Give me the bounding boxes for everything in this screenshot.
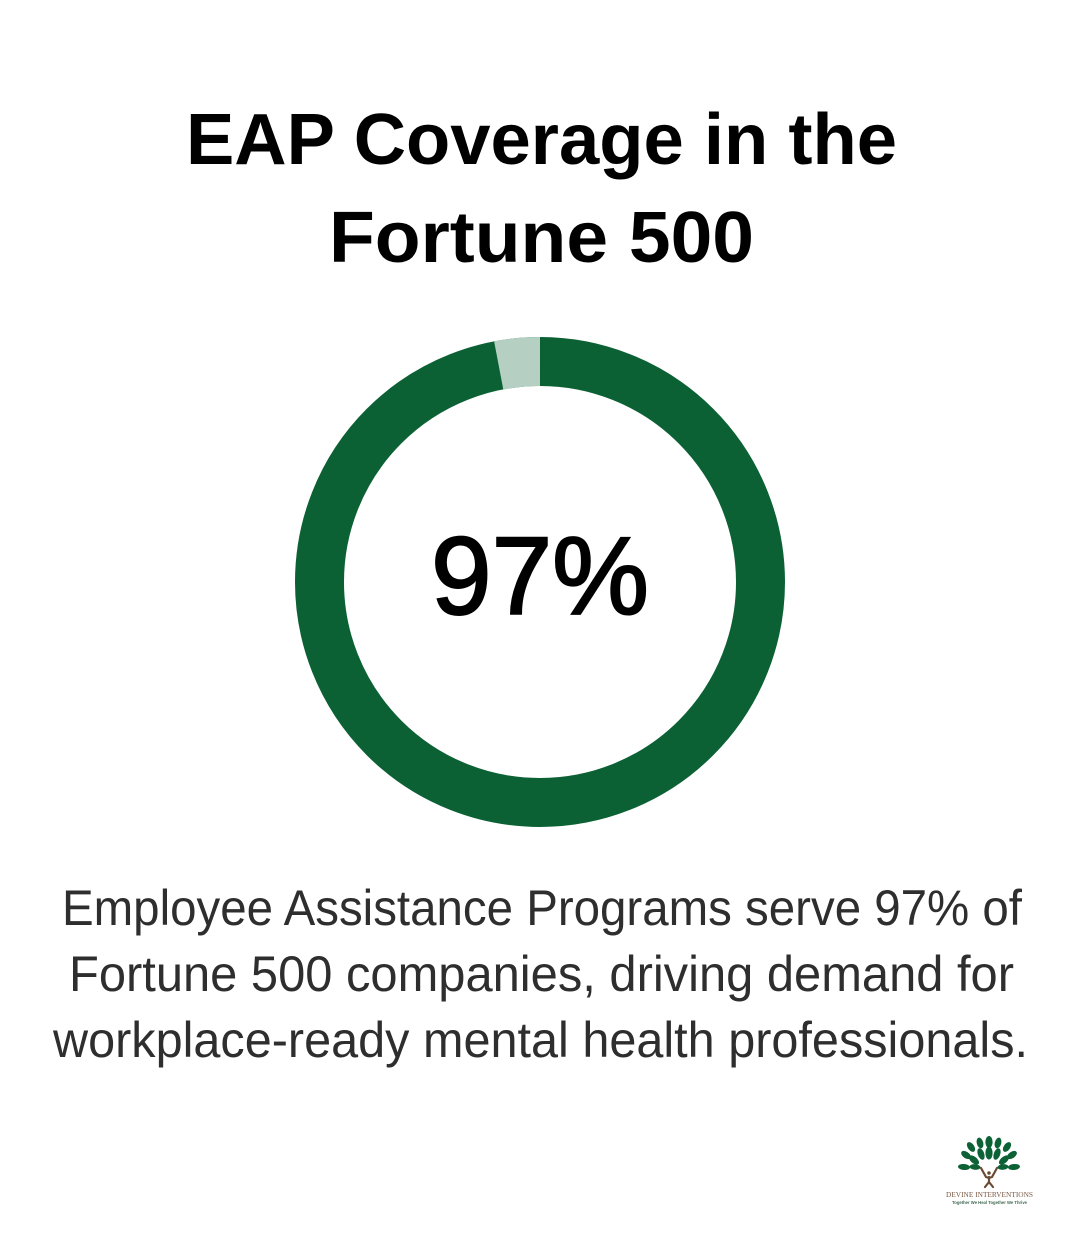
logo name: DEVINE INTERVENTIONS — [946, 1191, 1033, 1199]
icon: tree trunk figure — [981, 1168, 997, 1187]
logo tagline: Together We Heal Together We Thrive — [952, 1200, 1027, 1205]
description text — [52, 880, 1028, 1068]
title: Fortune 500 — [329, 198, 754, 278]
title: EAP Coverage in the — [186, 100, 897, 180]
description text: workplace-ready mental health professionals. — [52, 1012, 1028, 1068]
logo: Devine Interventions — [946, 1136, 1033, 1205]
donut value: 97% — [431, 515, 649, 638]
description text: Fortune 500 companies, driving demand for — [69, 946, 1014, 1002]
title — [186, 100, 897, 278]
icon: tree leaves — [958, 1136, 1020, 1171]
donut chart: 97% — [320, 362, 760, 802]
description text: Employee Assistance Programs serve 97% of — [62, 880, 1022, 936]
